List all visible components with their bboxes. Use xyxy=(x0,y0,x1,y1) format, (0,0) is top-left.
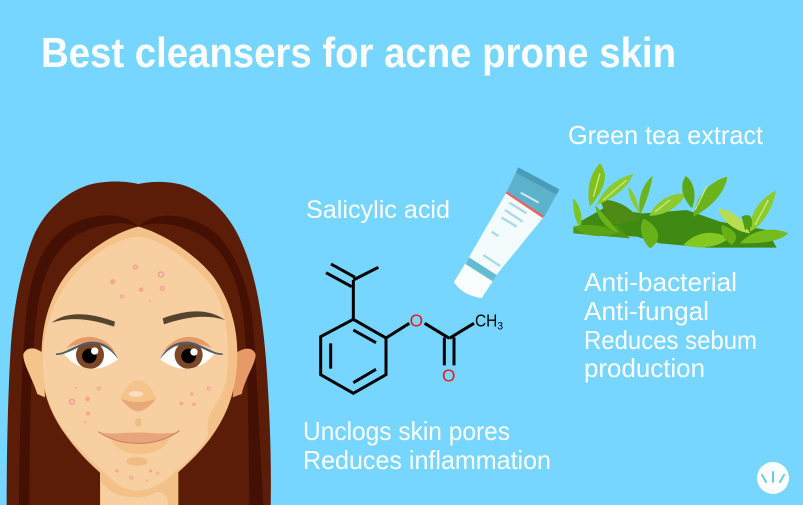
product: cream tube xyxy=(454,167,559,298)
list: green tea benefits: Anti-bacterial xyxy=(584,267,737,297)
illustration: face with acne xyxy=(7,181,271,505)
eyebrows xyxy=(52,314,115,327)
hair xyxy=(7,181,271,505)
bonds xyxy=(321,264,474,393)
tube cap xyxy=(507,167,559,217)
oxygen atom: O xyxy=(410,311,423,331)
list: green tea benefits: Anti-fungal xyxy=(584,296,709,326)
methyl group: CH xyxy=(475,311,500,331)
icon: logo badge xyxy=(757,462,789,494)
title: Best cleansers for acne prone skin xyxy=(41,29,676,76)
heading: green tea extract: Green tea extract xyxy=(568,120,764,150)
tube body xyxy=(454,192,544,298)
list: green tea benefits xyxy=(584,267,757,383)
face xyxy=(42,227,237,497)
methyl group: 3 xyxy=(497,320,503,332)
list: salicylic acid benefits: Reduces inflammation xyxy=(303,445,551,475)
heading: salicylic acid: Salicylic acid xyxy=(306,196,450,224)
list: green tea benefits: Reduces sebum xyxy=(584,325,757,355)
list: green tea benefits: production xyxy=(584,353,705,383)
carbonyl oxygen atom: O xyxy=(442,365,455,385)
nose xyxy=(121,380,156,411)
list: salicylic acid benefits: Unclogs skin pores xyxy=(303,416,510,446)
left eye xyxy=(56,337,118,369)
list: salicylic acid benefits xyxy=(303,416,551,475)
mouth xyxy=(98,431,179,466)
neck xyxy=(100,467,178,505)
acne spots xyxy=(69,264,211,482)
chemical structure: salicylic acid xyxy=(321,264,503,393)
image: green tea leaves xyxy=(573,163,788,248)
right eye xyxy=(160,337,223,369)
ears xyxy=(23,348,45,397)
